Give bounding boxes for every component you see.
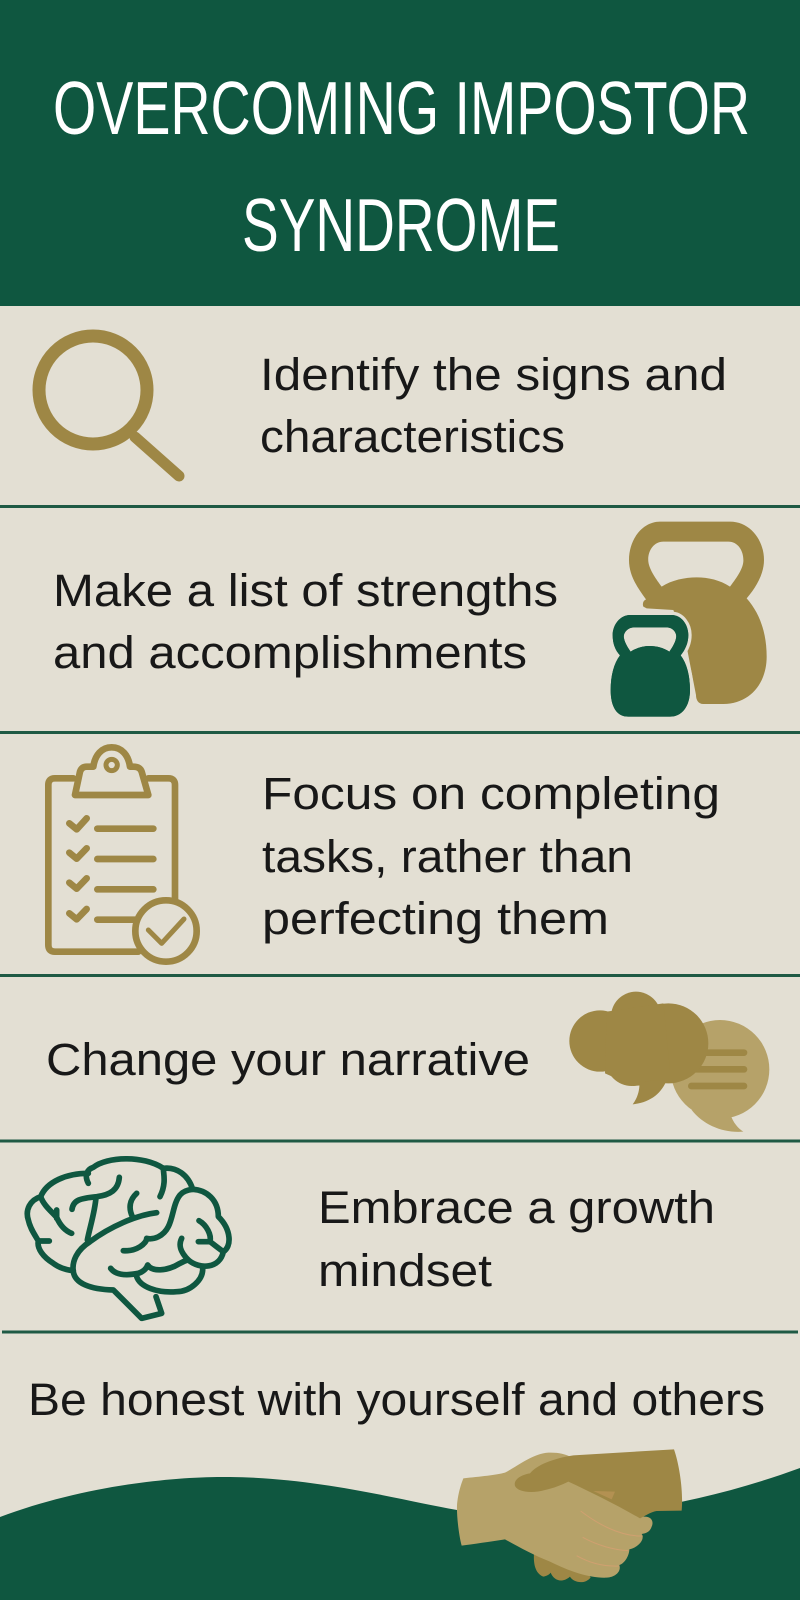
icon: speech bubbles	[569, 992, 769, 1132]
text: focus: perfecting them	[262, 893, 609, 944]
text: identify: characteristics	[260, 411, 565, 462]
text: growth: mindset	[318, 1245, 492, 1296]
text: growth: Embrace a growth	[318, 1182, 715, 1233]
icon: kettlebells	[611, 522, 767, 717]
icon: clipboard checklist	[48, 747, 197, 962]
green wave footer	[0, 1468, 800, 1600]
text: strengths: and accomplishments	[53, 627, 527, 678]
title: SYNDROME	[242, 183, 560, 267]
header band	[0, 0, 800, 306]
text: identify: Identify the signs and	[260, 349, 727, 400]
title	[53, 66, 750, 267]
row 5: growth mindset	[27, 1159, 715, 1318]
text: strengths: Make a list of strengths	[53, 565, 558, 616]
text: focus: tasks, rather than	[262, 831, 633, 882]
row 6: be honest: Be honest with yourself and others	[28, 1374, 765, 1425]
row 4: change your narrative	[46, 992, 769, 1132]
row 2: list of strengths	[53, 522, 767, 717]
icon: handshake	[457, 1449, 682, 1582]
icon: magnifying glass	[39, 336, 179, 476]
text: focus: Focus on completing	[262, 768, 720, 819]
text: strengths	[53, 565, 558, 678]
text: identify	[260, 349, 727, 462]
row 3: focus on completing tasks	[48, 747, 720, 962]
row 1: identify the signs	[39, 336, 727, 476]
text: growth	[318, 1182, 715, 1296]
text: focus	[262, 768, 720, 944]
text: narrative: Change your narrative	[46, 1034, 530, 1085]
icon: brain	[27, 1159, 229, 1318]
